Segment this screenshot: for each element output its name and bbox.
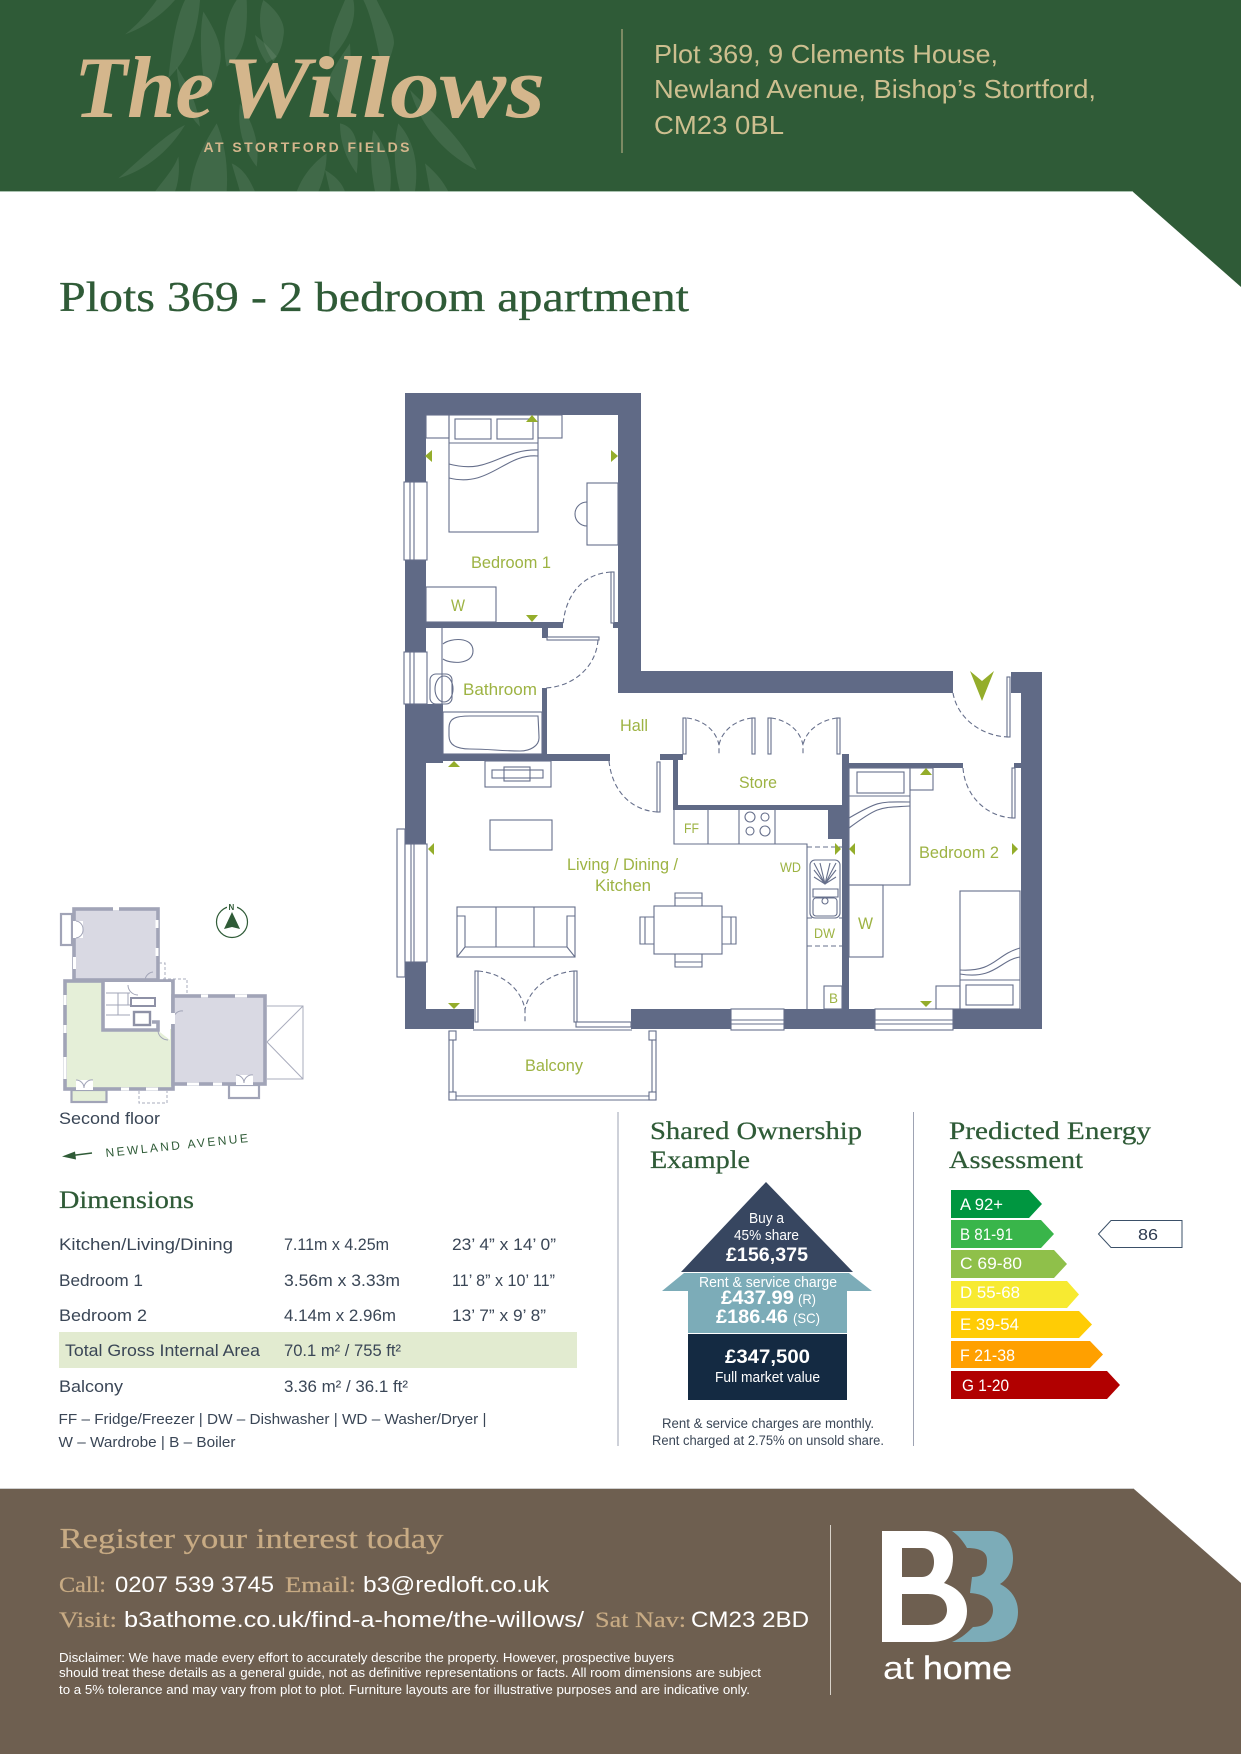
development logo: The Willows <box>74 40 545 155</box>
floor label: Second floor <box>59 1110 161 1128</box>
register heading: Register your interest today <box>60 1523 444 1555</box>
disclaimer <box>59 1651 762 1697</box>
contact details: Email: <box>285 1572 356 1597</box>
street name: NEWLAND AVENUE <box>105 1131 249 1160</box>
room labels: WD <box>780 859 801 875</box>
dimensions table: 4.14m x 2.96m <box>284 1306 396 1325</box>
base: full market value: £347,500 <box>725 1347 810 1368</box>
energy rating bars <box>951 1190 1120 1399</box>
dimensions table: 13’ 7” x 9’ 8” <box>452 1306 546 1325</box>
dimensions table <box>59 1235 577 1396</box>
B3 at home logo: home <box>923 1650 1012 1686</box>
room labels: B <box>829 990 838 1006</box>
page title: Plots 369 - 2 bedroom apartment <box>59 275 689 321</box>
windows and balcony doors <box>64 907 253 1090</box>
plot address: CM23 0BL <box>654 110 784 140</box>
disclaimer: should treat these details as a general guide, not as definitive representations or facts. All room dimensions are subject <box>59 1666 762 1680</box>
entrance arrow <box>970 671 994 701</box>
contact details <box>59 1572 809 1632</box>
plot address <box>654 39 1096 140</box>
development logo: The Willows: The <box>74 40 214 137</box>
room labels: Bedroom 2 <box>919 843 999 862</box>
power and orientation markers <box>425 415 1018 1009</box>
dimensions heading: Dimensions <box>59 1187 194 1214</box>
contact details: 0207 539 3745 <box>115 1572 274 1597</box>
room labels: Bathroom <box>463 680 537 699</box>
middle: rent and service charge: £186.46 <box>716 1307 788 1328</box>
middle: rent and service charge: (SC) <box>793 1310 820 1326</box>
base: full market value: Full market value <box>715 1370 820 1386</box>
room labels: Kitchen <box>595 876 651 895</box>
doors <box>475 572 1015 1027</box>
dashed neighbouring balconies <box>139 963 187 1103</box>
room labels: FF <box>684 820 699 836</box>
shared ownership notes <box>652 1416 884 1448</box>
balconies and blocks <box>61 909 265 1102</box>
roof: share purchase <box>681 1182 853 1272</box>
divider: shared ownership <box>618 1112 619 1446</box>
B3 at home logo <box>882 1531 1018 1686</box>
external walls and partitions <box>405 393 1042 1029</box>
street direction arrow <box>62 1152 92 1160</box>
room labels: Store <box>739 773 777 792</box>
middle: rent and service charge: (R) <box>798 1291 816 1307</box>
dimensions table: Bedroom 1 <box>59 1271 143 1290</box>
shared ownership notes: Rent charged at 2.75% on unsold share. <box>652 1433 884 1448</box>
dimensions table: 23’ 4” x 14’ 0” <box>452 1235 556 1254</box>
room labels: Hall <box>620 716 648 735</box>
energy rating bars: C 69-80 <box>960 1255 1022 1273</box>
energy heading <box>949 1118 1152 1174</box>
plot address: Newland Avenue, Bishop’s Stortford, <box>654 74 1096 104</box>
roof: share purchase: 45% share <box>734 1228 799 1244</box>
plot address: Plot 369, 9 Clements House, <box>654 39 998 69</box>
room labels <box>451 553 999 1075</box>
shared ownership notes: Rent & service charges are monthly. <box>662 1416 874 1431</box>
bedroom 2 furniture <box>849 768 1020 1009</box>
contact details: b3@redloft.co.uk <box>363 1572 550 1597</box>
contact details: Call: <box>59 1572 106 1597</box>
contact details: Sat Nav: <box>595 1607 686 1632</box>
predicted rating pointer: 86 <box>1138 1227 1158 1244</box>
balcony door swings <box>76 921 253 1088</box>
energy rating bars: A 92+ <box>960 1196 1003 1214</box>
room labels: W <box>451 596 465 615</box>
dimensions table: 70.1 m² / 755 ft² <box>284 1341 401 1360</box>
middle: rent and service charge: £437.99 <box>721 1288 794 1309</box>
canopy <box>267 1006 303 1079</box>
living room furniture <box>457 761 736 967</box>
contact details: b3athome.co.uk/find-a-home/the-willows/ <box>124 1607 585 1632</box>
predicted rating pointer <box>1098 1220 1182 1248</box>
development logo: The Willows: Willows <box>222 40 545 137</box>
willow leaf pattern <box>118 0 477 192</box>
room labels: DW <box>814 925 836 941</box>
disclaimer: Disclaimer: We have made every effort to accurately describe the property. However, prospective buyers <box>59 1651 674 1665</box>
key plan <box>61 907 303 1103</box>
contact details: Visit: <box>59 1607 117 1632</box>
north compass: N <box>228 903 234 912</box>
dimensions table: Bedroom 2 <box>59 1306 147 1325</box>
energy rating bars: B 81-91 <box>960 1226 1013 1244</box>
roof: share purchase: £156,375 <box>726 1245 808 1266</box>
base: full market value <box>688 1334 847 1400</box>
middle: rent and service charge: Rent & service charge <box>699 1275 837 1291</box>
dimensions table: Kitchen/Living/Dining <box>59 1235 233 1254</box>
disclaimer: to a 5% tolerance and may vary from plot to plot. Furniture layouts are for illustrative purposes and are indicative only. <box>59 1683 750 1697</box>
dimensions table: Total Gross Internal Area <box>65 1341 261 1360</box>
room labels: Living / Dining / <box>567 855 678 874</box>
bathroom fixtures <box>430 628 542 754</box>
dimensions table: Balcony <box>59 1377 124 1396</box>
windows <box>397 482 953 1030</box>
floor plan <box>397 393 1042 1100</box>
footer banner <box>0 1488 1241 1754</box>
energy rating bars: F 21-38 <box>960 1347 1015 1365</box>
north compass <box>216 902 248 938</box>
header divider <box>622 29 623 153</box>
abbreviations key: FF – Fridge/Freezer | DW – Dishwasher | WD – Washer/Dryer | <box>58 1412 487 1428</box>
energy rating bars: G 1-20 <box>962 1377 1009 1395</box>
shared ownership house graphic <box>662 1182 872 1400</box>
dimensions table: 11’ 8” x 10’ 11” <box>452 1271 555 1290</box>
bedroom 1 furniture <box>426 415 618 622</box>
shared ownership heading: Shared Ownership <box>650 1118 862 1145</box>
dimensions table: 7.11m x 4.25m <box>284 1235 389 1254</box>
header banner <box>0 0 1241 287</box>
balcony <box>449 1030 656 1100</box>
footer divider <box>830 1525 831 1695</box>
energy rating bars: E 39-54 <box>960 1316 1019 1334</box>
B3 at home logo: at <box>883 1650 914 1686</box>
room labels: Balcony <box>525 1056 583 1075</box>
development logo: The Willows: AT STORTFORD FIELDS <box>204 139 410 155</box>
shared ownership heading <box>650 1118 862 1174</box>
energy heading: Predicted Energy <box>949 1118 1152 1145</box>
room labels: Bedroom 1 <box>471 553 551 572</box>
room labels: W <box>858 914 873 933</box>
abbreviations key <box>58 1412 487 1451</box>
contact details: CM23 2BD <box>691 1607 809 1632</box>
abbreviations key: W – Wardrobe | B – Boiler <box>58 1435 236 1451</box>
divider: energy <box>913 1112 914 1446</box>
dimensions table: 3.36 m² / 36.1 ft² <box>284 1377 408 1396</box>
roof: share purchase: Buy a <box>749 1211 785 1227</box>
kitchen units and appliances <box>674 809 842 1009</box>
dimensions table: 3.56m x 3.33m <box>284 1271 400 1290</box>
energy rating bars: D 55-68 <box>960 1284 1020 1302</box>
shared ownership heading: Example <box>650 1147 750 1174</box>
energy heading: Assessment <box>949 1147 1083 1174</box>
central core <box>103 972 183 1040</box>
middle: rent and service charge <box>662 1273 872 1333</box>
